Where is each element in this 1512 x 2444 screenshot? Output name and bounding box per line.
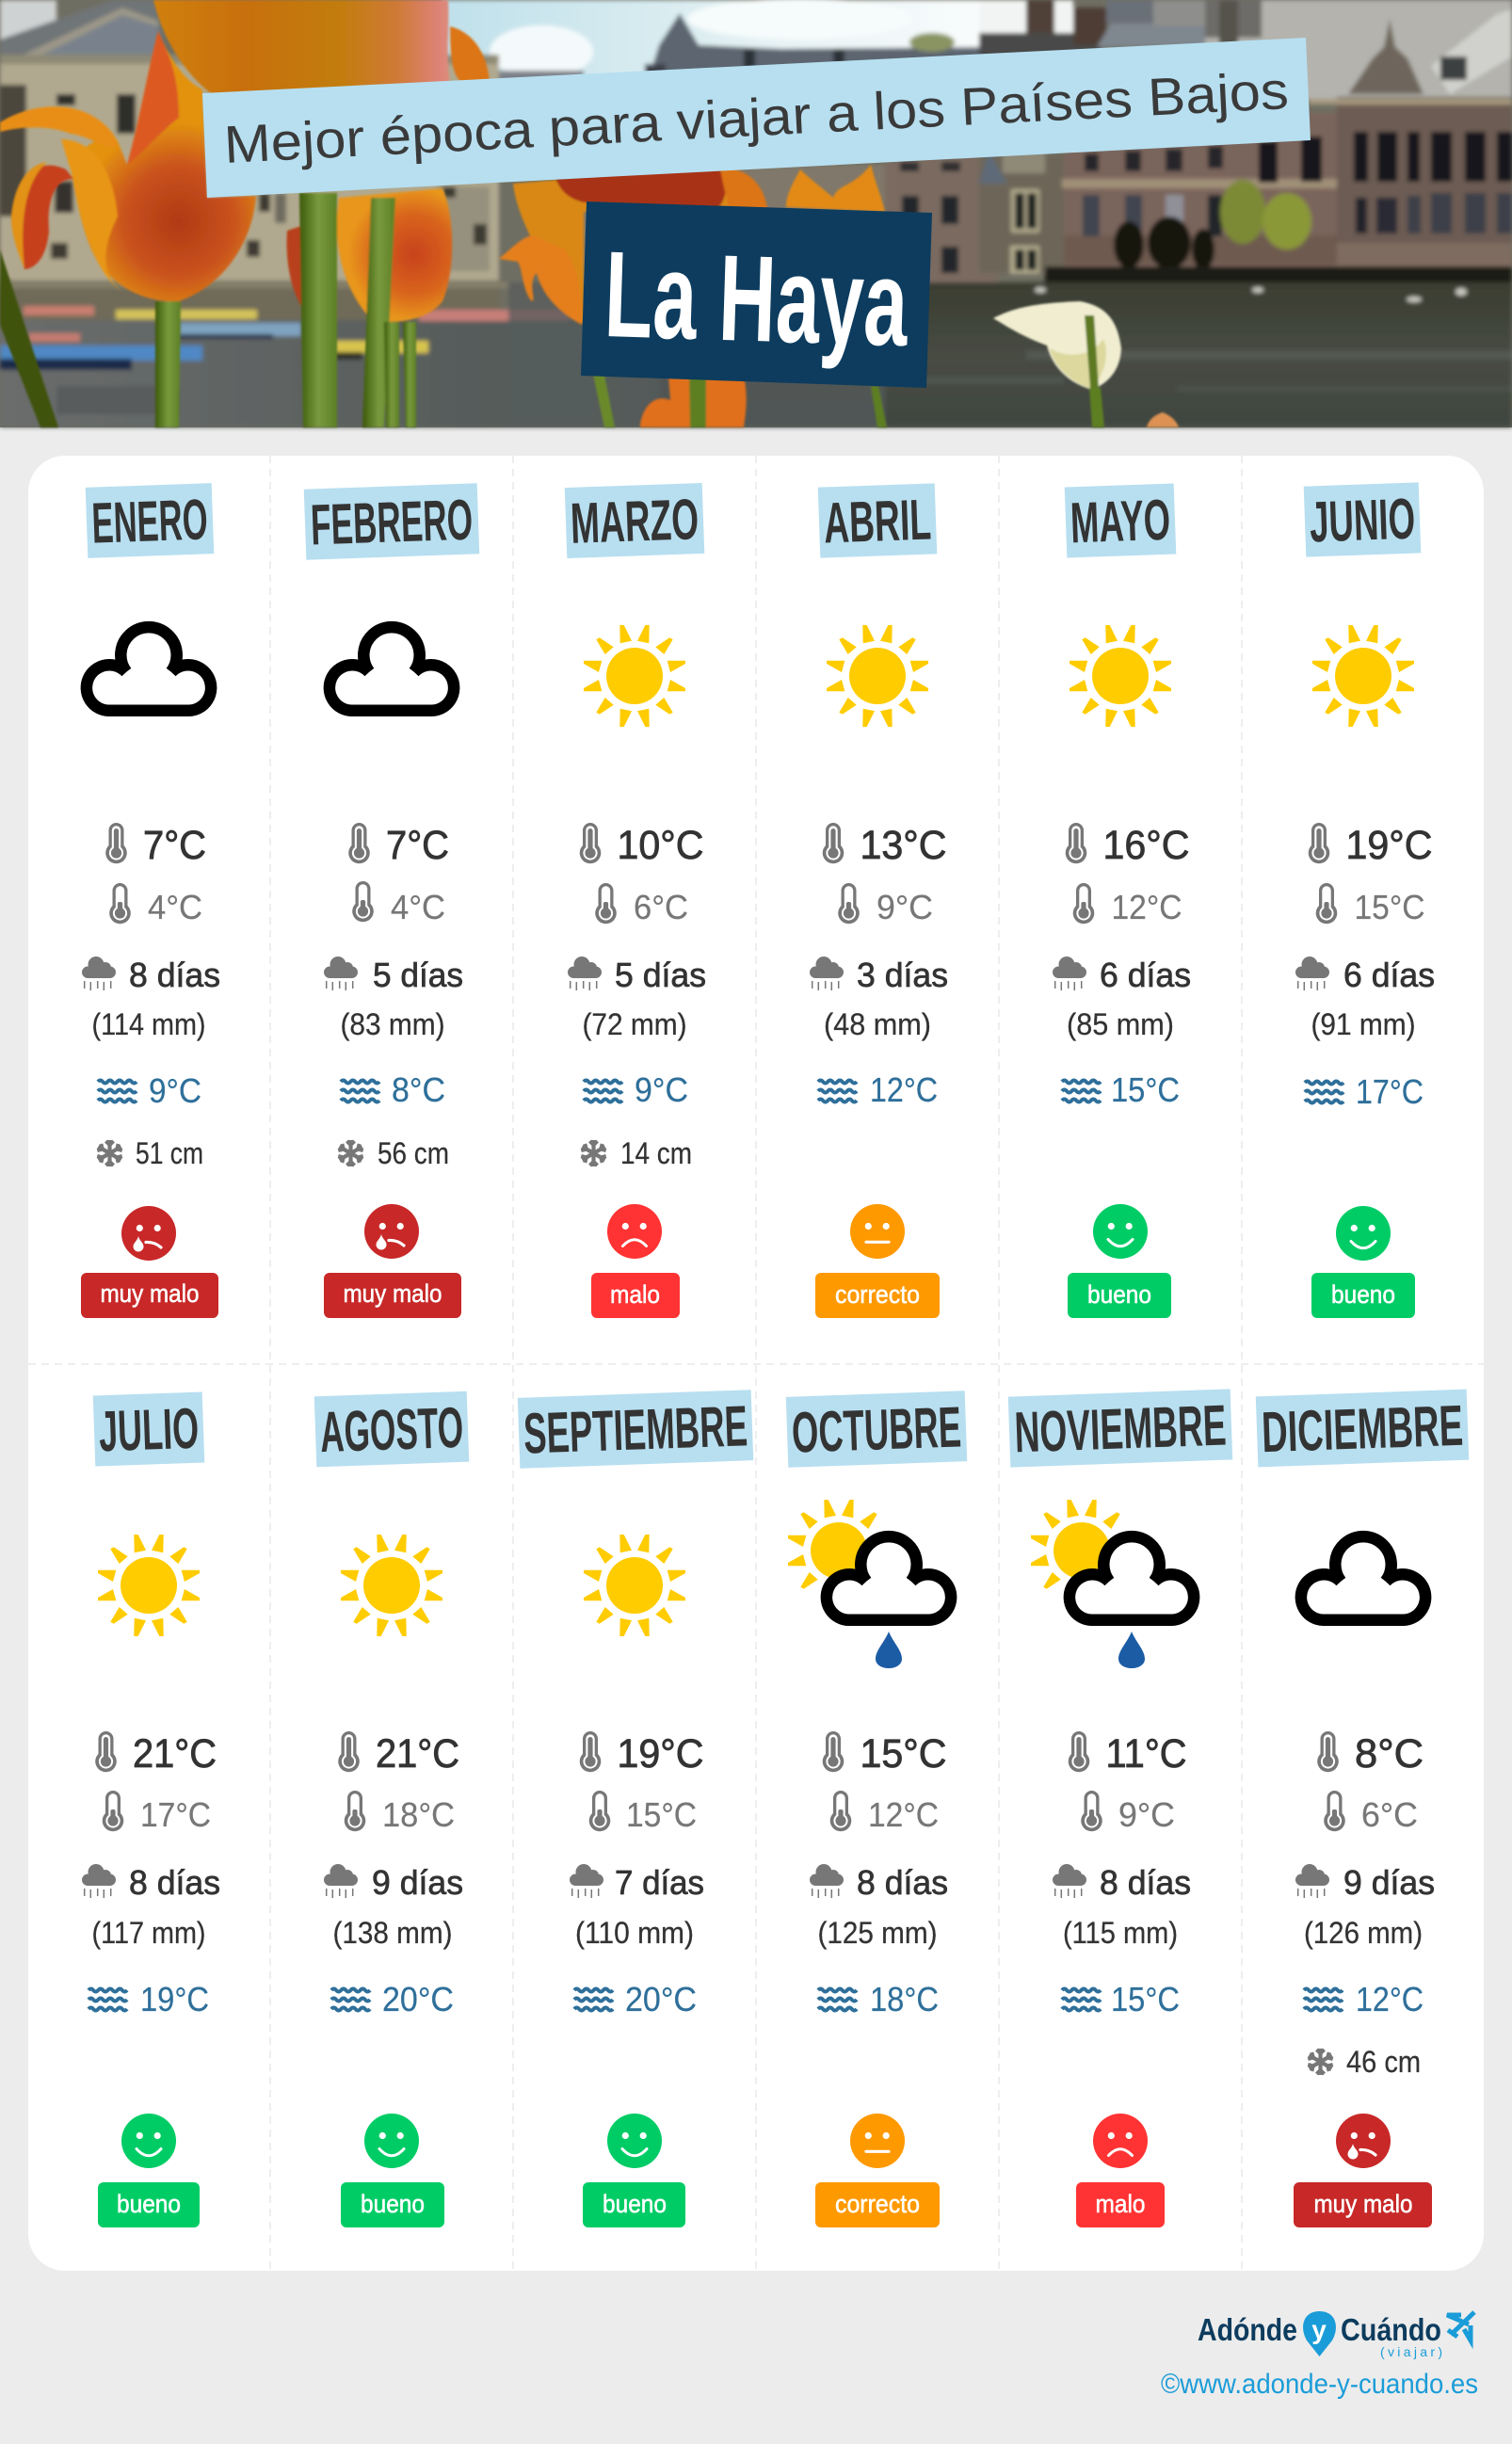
- rating: malo: [591, 1204, 680, 1318]
- sea temperature: [818, 1980, 939, 2018]
- title strip: [202, 38, 1311, 198]
- min temperature: 12°C: [868, 1795, 939, 1834]
- rating: muy malo: [81, 1206, 218, 1318]
- max temperature: [1069, 1731, 1186, 1777]
- white tulip: [993, 301, 1121, 390]
- sea temperature: [1305, 1072, 1424, 1111]
- city title: La Haya: La Haya: [603, 225, 911, 372]
- min temperature: 9°C: [877, 888, 933, 926]
- header photo: tulips in front of the Binnenhof: [0, 0, 1512, 427]
- rainy days: [1053, 1863, 1191, 1902]
- max temperature: [1066, 823, 1190, 868]
- max temperature: 21°C: [376, 1731, 459, 1777]
- rainy days: [1053, 956, 1191, 994]
- rainy days: [570, 1863, 704, 1902]
- min temperature: 9°C: [1118, 1795, 1175, 1834]
- rainy days: 3 días: [857, 956, 948, 994]
- website url: ©www.adonde-y-cuando.es: [1161, 2369, 1478, 2400]
- green stems: [1085, 315, 1099, 388]
- icon: cloud: [330, 627, 454, 711]
- max temperature: 7°C: [386, 823, 449, 868]
- rating: muy malo: muy malo: [1314, 2190, 1412, 2218]
- max temperature: 11°C: [1105, 1731, 1186, 1777]
- max temperature: [823, 1731, 947, 1777]
- max temperature: 15°C: [861, 1731, 947, 1777]
- panel: noviembre: [1008, 1389, 1232, 2227]
- rainfall: (114 mm): [92, 1007, 205, 1041]
- icon: sun: [98, 1535, 200, 1636]
- min temperature: 12°C: [1111, 888, 1182, 926]
- min temperature: [1073, 883, 1182, 926]
- sea temperature: 15°C: [1111, 1980, 1180, 2018]
- sea temperature: 8°C: [392, 1070, 445, 1109]
- rainy days: [82, 956, 220, 994]
- month: julio: JULIO: [98, 1396, 200, 1463]
- rainy days: 6 días: [1343, 956, 1435, 994]
- centre-left bud: [287, 226, 301, 306]
- max temperature: [823, 823, 947, 868]
- rainy days: 6 días: [1100, 956, 1191, 994]
- sea temperature: [88, 1980, 209, 2018]
- rating: bueno: [341, 2114, 444, 2227]
- spike and body of left tulip: [71, 31, 256, 301]
- max temperature: [1309, 823, 1433, 868]
- max temperature: 19°C: [618, 1731, 704, 1777]
- rating: malo: malo: [610, 1280, 660, 1309]
- max temperature: [338, 1731, 459, 1777]
- sea temperature: 19°C: [140, 1980, 209, 2018]
- sea temperature: 12°C: [1356, 1980, 1424, 2018]
- sea temperature: 9°C: [149, 1071, 201, 1110]
- rainy days: [810, 956, 948, 994]
- month: noviembre: NOVIEMBRE: [1013, 1393, 1228, 1464]
- min temperature: [1316, 883, 1425, 926]
- rating: bueno: [1311, 1206, 1415, 1318]
- max temperature: [348, 823, 449, 868]
- panel: mayo: [1053, 483, 1191, 1318]
- logo: Adónde y Cuándo: y: [1311, 2315, 1327, 2344]
- min temperature: [1081, 1791, 1175, 1834]
- icon: sun: [1312, 625, 1414, 727]
- logo: Adónde y Cuándo: [1198, 2311, 1474, 2359]
- rating: malo: malo: [1096, 2190, 1145, 2218]
- max temperature: 19°C: [1346, 823, 1433, 868]
- month: julio: [93, 1391, 204, 1467]
- logo: Adónde y Cuándo: Cuándo: [1341, 2312, 1441, 2347]
- rainfall: (85 mm): [1067, 1007, 1174, 1041]
- icon: cloud: [87, 627, 211, 711]
- snow depth: 51 cm: [136, 1136, 203, 1170]
- rating: correcto: correcto: [835, 1280, 920, 1309]
- month: febrero: [304, 483, 479, 560]
- icon: sun: [584, 1535, 685, 1636]
- min temperature: 4°C: [148, 888, 202, 926]
- max temperature: [580, 823, 704, 868]
- rainfall: (117 mm): [92, 1916, 205, 1950]
- rating: correcto: correcto: [835, 2190, 920, 2218]
- sea temperature: 20°C: [625, 1980, 697, 2018]
- month: marzo: [565, 483, 704, 558]
- rainy days: 8 días: [129, 1863, 220, 1902]
- big top tulip: [153, 0, 452, 104]
- rating: muy malo: muy malo: [100, 1279, 200, 1308]
- month: mayo: [1065, 483, 1176, 558]
- sea temperature: [818, 1070, 938, 1109]
- min temperature: [595, 883, 688, 926]
- sea temperature: 18°C: [870, 1980, 939, 2018]
- min temperature: 15°C: [626, 1795, 697, 1834]
- sea temperature: 17°C: [1356, 1072, 1424, 1111]
- max temperature: [95, 1731, 217, 1777]
- panel: septiembre: [518, 1390, 753, 2227]
- month: mayo: MAYO: [1070, 488, 1171, 555]
- rainy days: [1295, 956, 1435, 994]
- rainfall: (115 mm): [1063, 1916, 1178, 1950]
- sea temperature: 15°C: [1111, 1070, 1180, 1109]
- rating: muy malo: muy malo: [343, 1279, 442, 1308]
- sea temperature: [98, 1071, 201, 1110]
- month: agosto: AGOSTO: [319, 1395, 464, 1464]
- month: agosto: [314, 1391, 469, 1467]
- min temperature: [1324, 1791, 1418, 1834]
- sea temperature: [1304, 1980, 1424, 2018]
- min temperature: [109, 883, 202, 926]
- panel: marzo: [565, 483, 706, 1318]
- centre orange tulip: [513, 165, 753, 325]
- month: octubre: [786, 1391, 967, 1468]
- icon: sun behind cloud with rain drop: [1031, 1500, 1194, 1668]
- icon: sun: [827, 625, 928, 727]
- rainy days: 8 días: [1100, 1863, 1191, 1902]
- rainy days: [82, 1863, 220, 1902]
- max temperature: [1317, 1731, 1424, 1777]
- snow depth: 46 cm: [1346, 2045, 1421, 2079]
- icon: cloud: [1301, 1536, 1425, 1620]
- sea temperature: [1062, 1070, 1180, 1109]
- rainy days: 8 días: [857, 1863, 948, 1902]
- min temperature: 15°C: [1354, 888, 1425, 926]
- min temperature: 6°C: [1361, 1795, 1418, 1834]
- sea temperature: [331, 1980, 454, 2018]
- rainy days: 5 días: [373, 956, 463, 994]
- rating: bueno: bueno: [1087, 1280, 1151, 1309]
- panel: diciembre: [1256, 1390, 1469, 2227]
- sea temperature: 12°C: [870, 1070, 938, 1109]
- rainy days: 7 días: [615, 1863, 704, 1902]
- rating: malo: [1076, 2114, 1165, 2227]
- panel: agosto: [314, 1391, 469, 2227]
- icon: sun: [1070, 625, 1171, 727]
- panel: febrero: [304, 483, 479, 1318]
- sea temperature: [1062, 1980, 1180, 2018]
- rainy days: 9 días: [1343, 1863, 1435, 1902]
- rating: bueno: bueno: [361, 2190, 425, 2218]
- max temperature: 16°C: [1103, 823, 1190, 868]
- month: noviembre: [1008, 1389, 1232, 1468]
- max temperature: 8°C: [1355, 1731, 1424, 1777]
- month: octubre: OCTUBRE: [791, 1394, 962, 1465]
- month: marzo: MARZO: [570, 487, 700, 555]
- rating: bueno: bueno: [1331, 1280, 1395, 1309]
- max temperature: 7°C: [143, 823, 206, 868]
- rainfall: (126 mm): [1304, 1916, 1423, 1950]
- min temperature: [830, 1791, 939, 1834]
- panel: abril: [810, 483, 948, 1318]
- rainfall: (110 mm): [575, 1916, 694, 1950]
- rainy days: 5 días: [615, 956, 706, 994]
- icon: sun: [584, 625, 685, 727]
- month: junio: JUNIO: [1309, 487, 1416, 554]
- snow depth: [96, 1136, 203, 1170]
- max temperature: 13°C: [861, 823, 947, 868]
- min temperature: 17°C: [140, 1795, 211, 1834]
- min temperature: [103, 1791, 211, 1834]
- main white card: [28, 456, 1484, 2271]
- month: enero: [86, 483, 214, 558]
- sea temperature: 20°C: [382, 1980, 454, 2018]
- sea temperature: [341, 1070, 445, 1109]
- rainfall: (48 mm): [824, 1007, 931, 1041]
- rating: muy malo: [1294, 2114, 1432, 2227]
- rating: bueno: bueno: [603, 2190, 667, 2218]
- rainy days: [324, 956, 463, 994]
- month: febrero: FEBRERO: [310, 488, 474, 556]
- icon: sun: [341, 1535, 442, 1636]
- month: enero: ENERO: [90, 487, 209, 555]
- rainy days: [568, 956, 706, 994]
- rating: correcto: [815, 2114, 940, 2227]
- title strip: Mejor época para viajar a los Países Bajos: [222, 60, 1290, 174]
- month: junio: [1304, 482, 1421, 557]
- rating: bueno: bueno: [117, 2190, 181, 2218]
- min temperature: 18°C: [382, 1795, 455, 1834]
- max temperature: [105, 823, 206, 868]
- min temperature: [345, 1791, 455, 1834]
- max temperature: 21°C: [133, 1731, 217, 1777]
- rainfall: (83 mm): [341, 1007, 444, 1041]
- min temperature: 4°C: [391, 888, 445, 926]
- snow depth: 14 cm: [620, 1136, 692, 1170]
- sea temperature: [584, 1070, 688, 1109]
- month: septiembre: [518, 1390, 753, 1469]
- month: abril: [818, 483, 937, 558]
- city title: La Haya: [581, 201, 932, 388]
- panel: junio: [1295, 482, 1435, 1318]
- logo: Adónde y Cuándo: (viajar): [1380, 2344, 1442, 2359]
- min temperature: [838, 883, 933, 926]
- month: abril: ABRIL: [823, 488, 932, 555]
- rainy days: [810, 1863, 948, 1902]
- icon: sun behind cloud with rain drop: [788, 1500, 951, 1668]
- max temperature: 10°C: [618, 823, 704, 868]
- snow depth: [580, 1136, 692, 1170]
- rainfall: (91 mm): [1311, 1007, 1416, 1041]
- max temperature: [580, 1731, 704, 1777]
- sea temperature: [574, 1980, 697, 2018]
- snow depth: [337, 1136, 449, 1170]
- rating: bueno: [98, 2114, 200, 2227]
- min temperature: [352, 881, 445, 926]
- rating: muy malo: [324, 1204, 461, 1318]
- rainfall: (138 mm): [333, 1916, 452, 1950]
- panel: octubre: [786, 1391, 967, 2227]
- rainy days: 9 días: [372, 1863, 463, 1902]
- rating: correcto: [815, 1204, 940, 1318]
- month: septiembre: SEPTIEMBRE: [523, 1393, 748, 1466]
- rainy days: [1295, 1863, 1435, 1902]
- rainy days: 8 días: [129, 956, 220, 994]
- snow depth: [1307, 2045, 1421, 2079]
- snow depth: 56 cm: [378, 1136, 449, 1170]
- sea temperature: 9°C: [635, 1070, 688, 1109]
- rating: bueno: [583, 2114, 685, 2227]
- rating: bueno: [1068, 1204, 1171, 1318]
- rainfall: (72 mm): [582, 1007, 687, 1041]
- min temperature: [589, 1791, 697, 1834]
- logo: Adónde y Cuándo: Adónde: [1198, 2312, 1297, 2347]
- panel: enero: [81, 483, 220, 1318]
- panel: julio: [82, 1391, 220, 2227]
- min temperature: 6°C: [634, 888, 688, 926]
- rainfall: (125 mm): [817, 1916, 938, 1950]
- rainy days: [324, 1863, 463, 1902]
